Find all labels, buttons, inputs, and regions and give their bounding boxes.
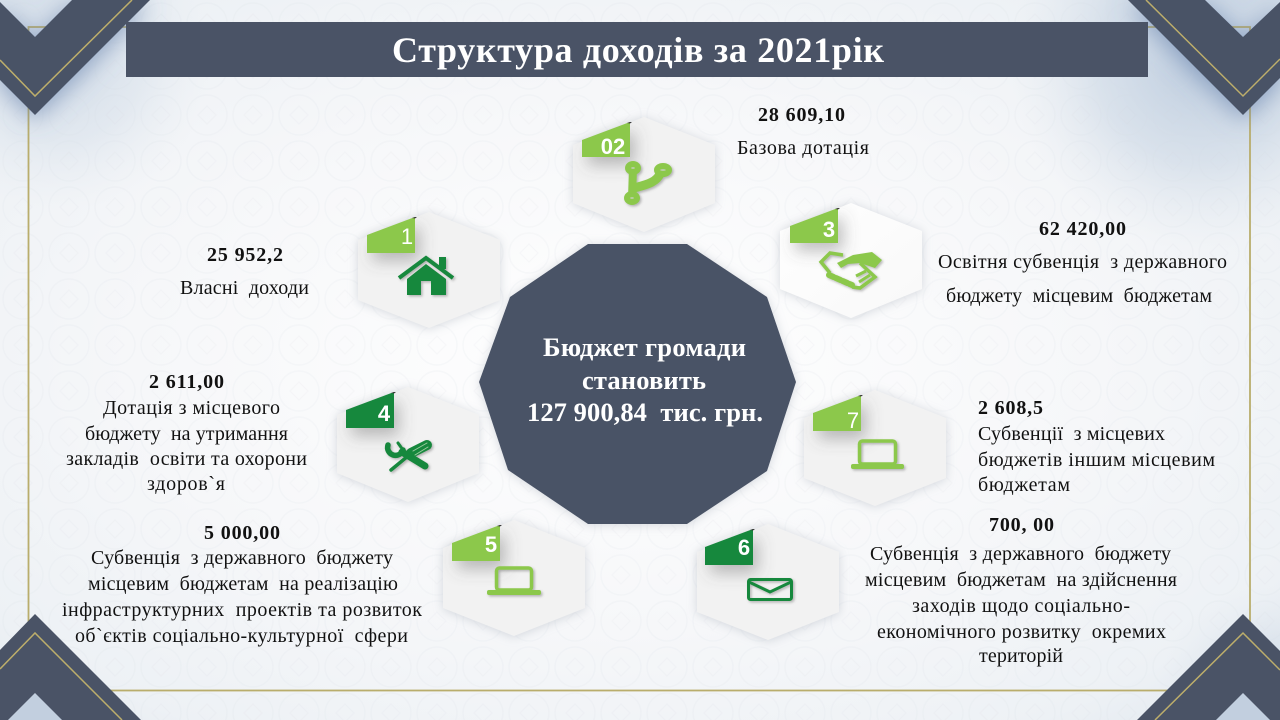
hexagon 4: local subsidy: 4 [378, 401, 391, 426]
text: development subvention: територій [979, 645, 1063, 667]
corner chevron: bottom left [0, 614, 141, 720]
central budget text: 127 900,84 тис. грн. [527, 397, 763, 427]
icon: handshake [821, 252, 882, 288]
text: infrastructure subvention: інфраструктурних проектів та розвиток [62, 599, 422, 621]
central budget text: становить [582, 365, 706, 395]
icon: fork [627, 164, 669, 202]
hexagon 3: education subvention: 3 [823, 217, 835, 242]
hexagon 2: base subsidy: 02 [601, 134, 625, 159]
hexagon 6: development subvention: 6 [738, 535, 750, 560]
hexagon 5: state subvention: 5 [485, 532, 497, 557]
text: development subvention: Субвенція з державного бюджету [870, 543, 1171, 565]
hexagon 1: own revenues: 1 [401, 224, 413, 249]
icon: envelope [748, 580, 792, 600]
text: own revenues [180, 244, 309, 299]
text: infrastructure subvention: Субвенція з державного бюджету [91, 547, 393, 569]
text: development subvention: 700, 00 [989, 514, 1054, 536]
hexagon 7: interbudget subventions [804, 390, 946, 506]
corner chevron: top left [0, 0, 150, 115]
text: development subvention [865, 514, 1177, 667]
text: infrastructure subvention: об`єктів соціально-культурної сфери [75, 625, 408, 647]
text: education subvention: бюджету місцевим бюджетам [946, 285, 1212, 307]
hexagon 5: state subvention [443, 520, 585, 636]
central budget polygon [479, 244, 796, 524]
corner chevron: bottom right [1137, 614, 1280, 720]
title: Структура доходів за 2021рік [392, 30, 884, 70]
central budget text [527, 332, 763, 427]
title bar [126, 22, 1148, 77]
text: base subsidy [737, 104, 869, 159]
icon: laptop [851, 441, 904, 469]
text: local subsidy: здоров`я [147, 473, 225, 495]
text: development subvention: місцевим бюджетам на здійснення [865, 569, 1177, 591]
icon: laptop [487, 568, 541, 595]
icon: tools [388, 443, 428, 470]
hexagon 6: development subvention [697, 524, 839, 640]
text: own revenues: Власні доходи [180, 277, 309, 299]
text: local subsidy: закладів освіти та охорони [66, 448, 307, 470]
text: interbudget subventions [978, 397, 1215, 496]
text: base subsidy: Базова дотація [737, 137, 869, 159]
hexagon 2: base subsidy [573, 117, 715, 232]
text: base subsidy: 28 609,10 [758, 104, 845, 126]
text: local subsidy: бюджету на утримання [85, 423, 288, 445]
text: local subsidy [66, 371, 307, 495]
text: education subvention: Освітня субвенція з державного [938, 251, 1227, 273]
text: education subvention [938, 218, 1227, 307]
text: local subsidy: Дотація з місцевого [103, 397, 280, 419]
hexagon 1: own revenues [358, 212, 500, 328]
corner chevron: top right [1128, 0, 1280, 115]
text: interbudget subventions: Субвенції з місцевих [978, 423, 1165, 445]
text: local subsidy: 2 611,00 [149, 371, 224, 393]
text: infrastructure subvention: місцевим бюджетам на реалізацію [88, 573, 398, 595]
icon: house [399, 257, 453, 295]
text: interbudget subventions: 2 608,5 [978, 397, 1043, 419]
text: interbudget subventions: бюджетам [978, 474, 1070, 496]
text: development subvention: заходів щодо соціально- [912, 595, 1130, 617]
text: development subvention: економічного розвитку окремих [877, 621, 1166, 643]
text: interbudget subventions: бюджетів іншим місцевим [978, 449, 1215, 471]
text: own revenues: 25 952,2 [207, 244, 283, 266]
hexagon 4: local subsidy [337, 387, 479, 502]
text: infrastructure subvention: 5 000,00 [204, 522, 280, 544]
hexagon 7: interbudget subventions: 7 [847, 408, 859, 433]
central budget text: Бюджет громади [543, 332, 746, 362]
hexagon 3: education subvention [780, 203, 922, 318]
text: education subvention: 62 420,00 [1039, 218, 1126, 240]
text: infrastructure subvention [62, 522, 422, 647]
